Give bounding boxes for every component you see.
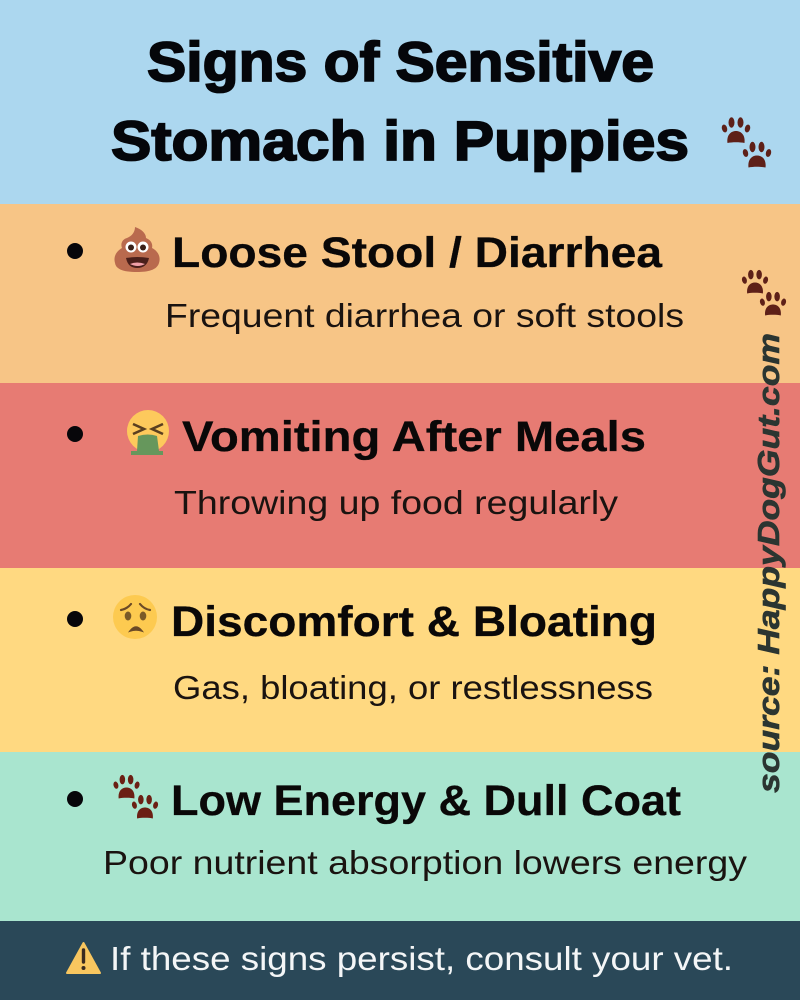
icon: poop xyxy=(114,227,160,272)
heading: Low Energy & Dull Coat xyxy=(171,777,681,825)
title: Signs of Sensitive xyxy=(147,30,654,93)
icon: paw prints xyxy=(113,775,159,818)
panel: footer xyxy=(0,921,800,1000)
icon: vomiting face xyxy=(127,410,169,455)
heading: Vomiting After Meals xyxy=(182,413,646,461)
icon: warning xyxy=(67,943,100,973)
description: Frequent diarrhea or soft stools xyxy=(165,297,684,334)
icon: worried face xyxy=(113,595,157,639)
source credit: source: HappyDogGut.com xyxy=(751,333,786,793)
panel: header xyxy=(0,0,800,204)
description: Poor nutrient absorption lowers energy xyxy=(103,844,748,881)
panel: vomiting xyxy=(0,383,800,568)
bullet xyxy=(67,243,83,259)
panel: loose stool xyxy=(0,204,800,383)
panel: low energy xyxy=(0,752,800,921)
icon: paw prints header xyxy=(721,117,772,168)
description: Throwing up food regularly xyxy=(174,484,619,521)
panel: discomfort xyxy=(0,568,800,752)
bullet xyxy=(67,611,83,627)
footer note: If these signs persist, consult your vet. xyxy=(110,940,733,977)
bullet xyxy=(67,791,83,807)
heading: Discomfort & Bloating xyxy=(171,598,657,646)
description: Gas, bloating, or restlessness xyxy=(173,669,653,706)
icon: paw prints side xyxy=(741,270,787,316)
title: Stomach in Puppies xyxy=(111,109,689,172)
bullet xyxy=(67,426,83,442)
heading: Loose Stool / Diarrhea xyxy=(172,229,663,277)
title xyxy=(111,30,689,172)
